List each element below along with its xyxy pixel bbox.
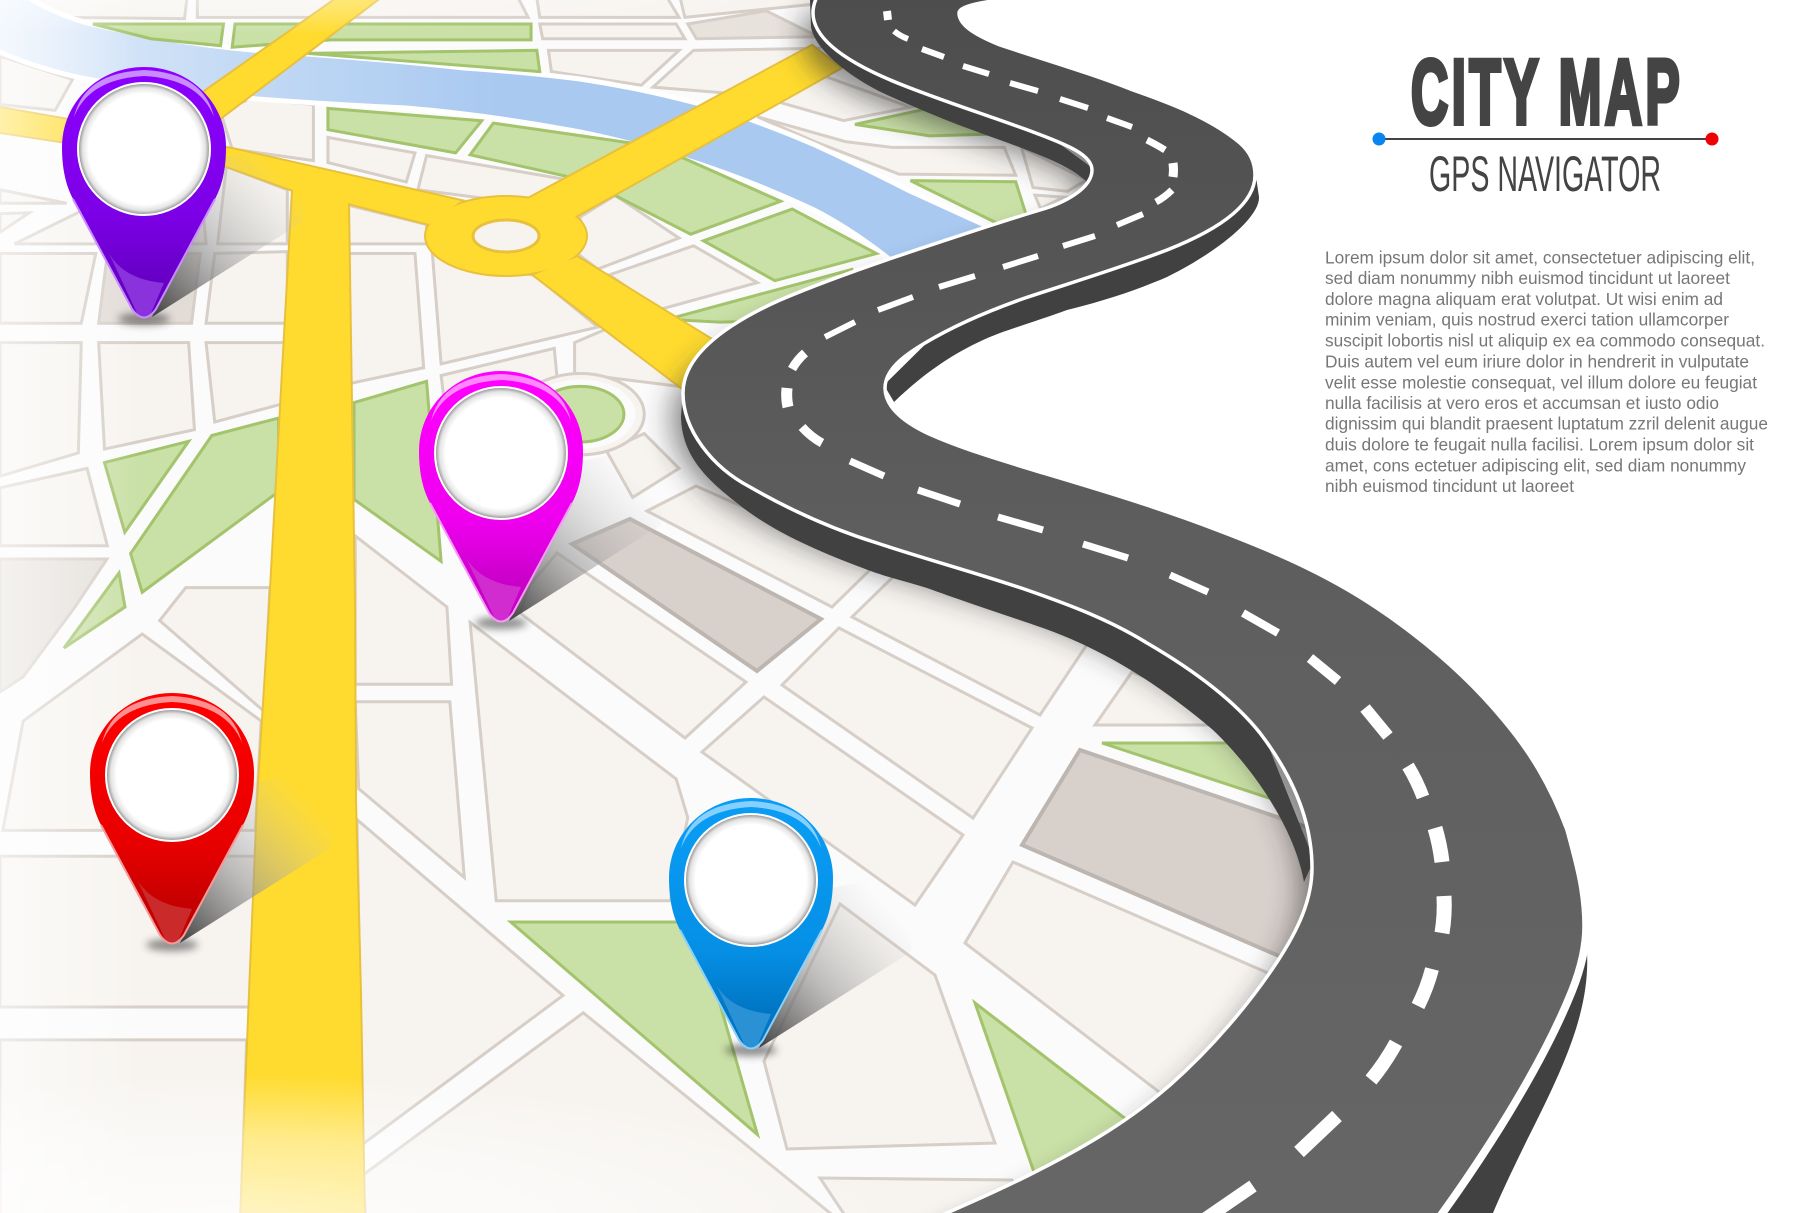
city map background <box>0 0 1310 1213</box>
yellow main roads and roundabout <box>0 0 840 1213</box>
pin: magenta <box>419 371 662 629</box>
map blocks, centre and right area <box>520 553 746 738</box>
road centre dashes <box>787 11 1444 1213</box>
green parks <box>93 24 876 592</box>
body paragraph: amet, cons ectetuer adipiscing elit, sed diam nonummy <box>1325 455 1746 475</box>
body paragraph: velit esse molestie consequat, vel illum dolore eu feugiat <box>1325 372 1757 392</box>
road drop shadow on map <box>652 0 1310 1213</box>
road side walls <box>681 0 1587 1213</box>
body paragraph: dolore magna aliquam erat volutpat. Ut wisi enim ad <box>1325 289 1723 309</box>
river <box>0 0 1000 262</box>
body paragraph: Lorem ipsum dolor sit amet, consectetuer adipiscing elit, <box>1325 247 1755 267</box>
body paragraph <box>1325 247 1768 496</box>
park circle with ring <box>542 372 646 456</box>
map blocks, lower-left area <box>0 536 836 1213</box>
body paragraph: suscipit lobortis nisl ut aliquip ex ea commodo consequat. <box>1325 331 1765 351</box>
map blocks, upper area <box>0 0 824 546</box>
winding road surface <box>683 0 1584 1213</box>
body paragraph: minim veniam, quis nostrud exerci tation ullamcorper <box>1325 310 1729 330</box>
body paragraph: duis dolore te feugait nulla facilisi. Lorem ipsum dolor sit <box>1325 435 1754 455</box>
white rim on lower right road edge <box>1422 927 1586 1213</box>
pin: blue <box>669 798 912 1056</box>
body paragraph: sed diam nonummy nibh euismod tincidunt ut laoreet <box>1325 268 1730 288</box>
body paragraph: nulla facilisis at vero eros et accumsan et iusto odio <box>1325 393 1719 413</box>
divider line with end dots <box>1372 132 1718 146</box>
body paragraph: nibh euismod tincidunt ut laoreet <box>1325 476 1574 496</box>
title: CITY MAP: CITY MAP <box>1411 41 1680 143</box>
body paragraph: Duis autem vel eum iriure dolor in hendrerit in vulputate <box>1325 351 1749 371</box>
body paragraph: dignissim qui blandit praesent luptatum zzril delenit augue <box>1325 414 1768 434</box>
pin: purple <box>62 67 304 325</box>
pin: red <box>90 693 332 951</box>
map edge fades <box>0 0 540 1213</box>
